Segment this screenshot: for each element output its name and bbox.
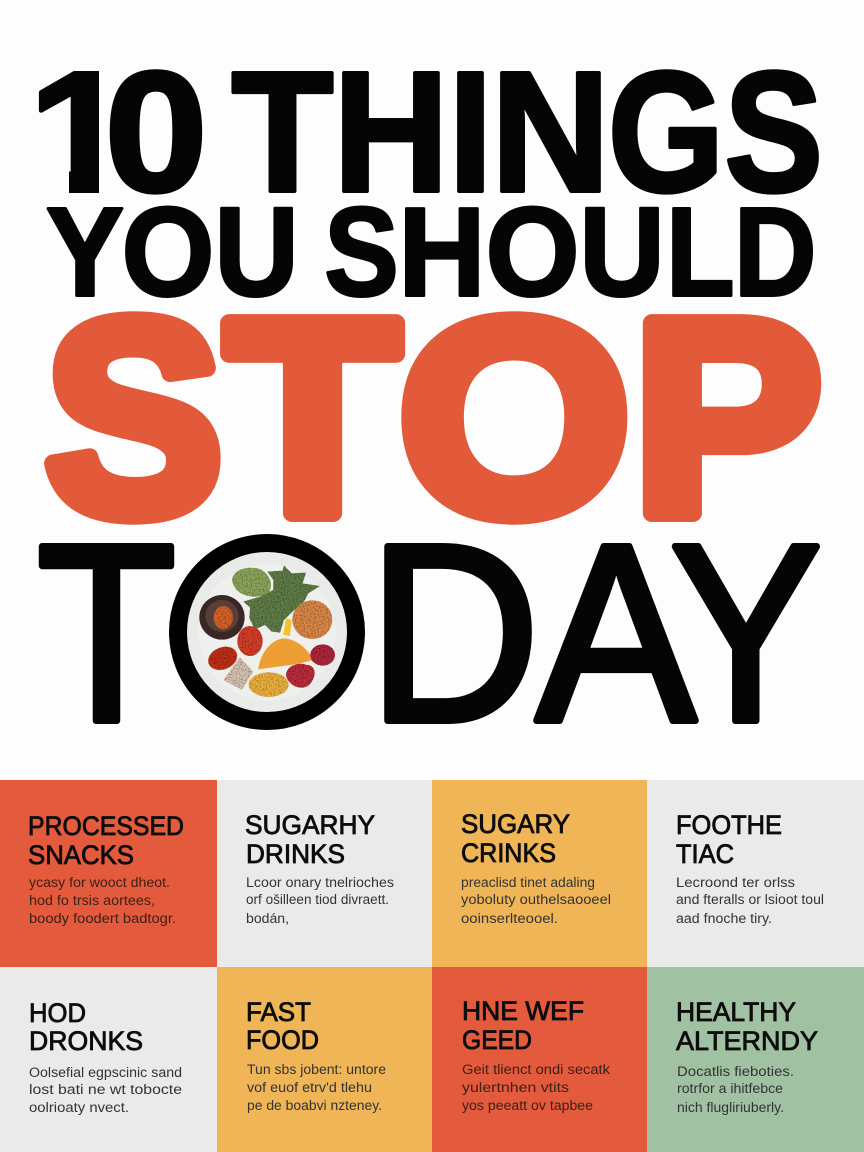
heading: hne wef geed: HNE WEF bbox=[462, 996, 584, 1026]
heading word: TODAY: T bbox=[37, 492, 176, 774]
yellow slice bbox=[283, 618, 292, 636]
heading word: TODAY: Y bbox=[670, 492, 822, 774]
heading line: YOU SHOULD: Y bbox=[46, 180, 124, 322]
heading: hne wef geed: GEED bbox=[462, 1025, 532, 1055]
panel: fast food bbox=[217, 967, 432, 1152]
heading: fast food: FAST bbox=[246, 997, 311, 1027]
heading: hod dronks: HOD bbox=[29, 998, 86, 1028]
body text: orf ošilleen tiod divraett. bbox=[246, 892, 389, 907]
heading: sugarhy drinks: DRINKS bbox=[246, 839, 345, 869]
body text: preaclisd tinet adaling bbox=[461, 875, 595, 890]
body text: rotrfor a ihitfebce bbox=[677, 1081, 783, 1096]
body text: oolrioaty nvect. bbox=[29, 1100, 129, 1115]
heading line: YOU SHOULD: O bbox=[486, 180, 580, 322]
body text bbox=[461, 875, 611, 926]
body text: vof euof etrv'd tlehu bbox=[247, 1080, 372, 1095]
heading word: STOP: P bbox=[633, 264, 822, 572]
heading: hod dronks: DRONKS bbox=[29, 1026, 143, 1056]
body text bbox=[29, 875, 176, 926]
panel grid bbox=[0, 780, 864, 1152]
heading: healthy alterndy: ALTERNDY bbox=[676, 1026, 818, 1056]
body text bbox=[29, 1065, 182, 1115]
heading: fast food: FOOD bbox=[246, 1025, 319, 1055]
body text: aad fnoche tiry. bbox=[676, 911, 772, 926]
heading word: STOP: T bbox=[226, 264, 399, 572]
panel: sugary crinks bbox=[432, 780, 647, 967]
heading line: 10 THINGS: G bbox=[608, 37, 724, 228]
body text: Lecroond ter orlss bbox=[676, 875, 795, 890]
heart berry bbox=[286, 664, 315, 688]
body text: hod fo trsis aortees, bbox=[29, 893, 155, 908]
body text bbox=[677, 1064, 794, 1115]
heading line: 10 THINGS: 0 bbox=[105, 37, 208, 228]
heading: healthy alterndy bbox=[676, 997, 818, 1056]
body text: bodán, bbox=[246, 911, 289, 926]
round cracker bbox=[292, 600, 332, 639]
icon: food plate inside letter O bbox=[178, 543, 356, 721]
body text: lost bati ne wt tobocte bbox=[29, 1082, 182, 1097]
heading: sugarhy drinks bbox=[245, 810, 375, 869]
heading line: YOU SHOULD: O bbox=[122, 180, 214, 322]
heading: sugary crinks: SUGARY bbox=[461, 809, 570, 839]
food items bbox=[199, 564, 336, 701]
body text bbox=[247, 1062, 386, 1113]
panel: healthy alterndy bbox=[647, 967, 864, 1152]
heading line: YOU SHOULD: D bbox=[734, 180, 816, 322]
heading: healthy alterndy: HEALTHY bbox=[676, 997, 796, 1027]
heading word: STOP: O bbox=[399, 264, 630, 572]
raspberry bbox=[310, 644, 335, 666]
heading: fast food bbox=[246, 997, 319, 1055]
heading line: YOU SHOULD bbox=[46, 180, 816, 322]
body text: nich flugliriuberly. bbox=[677, 1100, 784, 1115]
green spread bbox=[232, 568, 271, 597]
heading line: 10 THINGS: N bbox=[491, 37, 610, 228]
heading: processed snacks: PROCESSED bbox=[28, 811, 184, 841]
body text: Geit tlienct ondi secatk bbox=[462, 1062, 610, 1077]
heading word: TODAY: D bbox=[368, 492, 540, 774]
heading: processed snacks: SNACKS bbox=[28, 840, 134, 870]
heading word: STOP: S bbox=[45, 264, 222, 572]
heading line: 10 THINGS: I bbox=[448, 37, 493, 228]
heading line: YOU SHOULD: L bbox=[666, 180, 735, 322]
heading: sugary crinks bbox=[461, 809, 570, 868]
heading: sugary crinks: CRINKS bbox=[461, 838, 556, 868]
body text: yoboluty outhelsaooeel bbox=[461, 892, 611, 907]
plate ring bbox=[178, 543, 356, 721]
heading line: 10 THINGS: H bbox=[333, 37, 449, 228]
body text: boody foodert badtogr. bbox=[29, 911, 176, 926]
heading: processed snacks bbox=[28, 811, 184, 870]
body text: ycasy for wooct dheot. bbox=[29, 875, 170, 890]
red flakes bbox=[205, 643, 241, 674]
body text: Docatlis fieboties. bbox=[677, 1064, 794, 1079]
heading line: 10 THINGS: S bbox=[724, 37, 823, 228]
heading line: 10 THINGS bbox=[38, 69, 819, 195]
heading word: TODAY: A bbox=[536, 492, 696, 774]
golden patty bbox=[249, 672, 289, 697]
heading line: YOU SHOULD: U bbox=[214, 180, 299, 322]
body text bbox=[676, 875, 824, 926]
heading line: YOU SHOULD: H bbox=[398, 180, 486, 322]
dark bowl bbox=[199, 595, 245, 640]
body text: ooinserlteooel. bbox=[461, 911, 558, 926]
panel: sugarhy drinks bbox=[217, 780, 432, 967]
body text: Tun sbs jobent: untore bbox=[247, 1062, 386, 1077]
heading: foothe tiac: TIAC bbox=[676, 839, 734, 869]
body text: Oolsefial egpscinic sand bbox=[29, 1065, 182, 1080]
heading line: YOU SHOULD: U bbox=[579, 180, 665, 322]
body text: yos peeatt ov tapbee bbox=[462, 1098, 593, 1113]
heading line: 10 THINGS: 1 bbox=[28, 37, 135, 228]
panel: hne wef geed bbox=[432, 967, 647, 1152]
body text bbox=[462, 1062, 610, 1113]
checker cracker bbox=[223, 657, 253, 690]
orange wedge bbox=[258, 638, 313, 669]
title: 10 things you should stop today bbox=[38, 69, 822, 724]
lettuce bbox=[243, 565, 320, 633]
heading: sugarhy drinks: SUGARHY bbox=[245, 810, 375, 840]
plate inner well bbox=[199, 564, 336, 701]
panel: hod dronks bbox=[0, 967, 217, 1152]
heading line: YOU SHOULD: S bbox=[324, 180, 399, 322]
heading line: 10 THINGS: T bbox=[232, 37, 334, 228]
body text: and fteralls or lsioot toul bbox=[676, 892, 824, 907]
panel: processed snacks bbox=[0, 780, 217, 967]
body text: pe de boabvi nzteney. bbox=[247, 1098, 382, 1113]
body text: Lcoor onary tnelrioches bbox=[246, 875, 394, 890]
strawberry bbox=[237, 626, 263, 656]
heading: foothe tiac bbox=[676, 810, 782, 869]
heading: hne wef geed bbox=[462, 996, 584, 1055]
heading: foothe tiac: FOOTHE bbox=[676, 810, 782, 840]
body text: yulertnhen vtits bbox=[462, 1080, 569, 1095]
heading: hod dronks bbox=[29, 998, 143, 1056]
heading word: STOP bbox=[45, 264, 822, 572]
body text bbox=[246, 875, 394, 926]
heading word: TODAY bbox=[37, 492, 822, 774]
panel: foothe tiac bbox=[647, 780, 864, 967]
